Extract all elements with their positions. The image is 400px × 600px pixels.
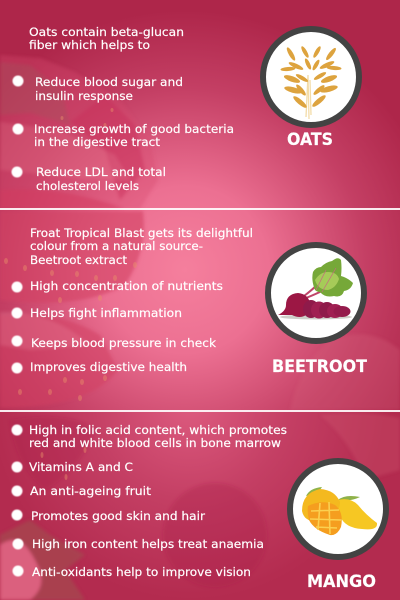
panel: beetroot text — [12, 226, 253, 374]
bullet: skin and hair: Promotes good skin and hair — [31, 509, 205, 523]
heading: mango: MANGO — [307, 572, 376, 591]
icon: mango — [290, 461, 386, 557]
bullet: digestive health: Improves digestive health — [30, 360, 187, 374]
bullet: blood pressure: Keeps blood pressure in check — [31, 336, 216, 350]
bullet: folic acid: High in folic acid content, which promotes — [29, 423, 287, 437]
intro text: beetroot: colour from a natural source- — [30, 239, 203, 253]
bullet: anti-ageing: An anti-ageing fruit — [30, 484, 152, 498]
panel: oats text — [12, 25, 234, 193]
bullet: good bacteria: in the digestive tract — [34, 135, 161, 149]
bullet: good bacteria: Increase growth of good bacteria — [34, 122, 234, 136]
divider bottom — [0, 410, 400, 412]
intro text: beetroot: Froat Tropical Blast gets its delightful — [30, 226, 253, 240]
bullet: blood sugar — [12, 75, 183, 103]
intro text: oats — [29, 25, 184, 52]
divider top — [0, 208, 400, 210]
bullet: inflammation: Helps fight inflammation — [30, 306, 182, 320]
bullet: blood sugar: insulin response — [35, 89, 133, 103]
bullet: folic acid: red and white blood cells in bone marrow — [29, 436, 281, 450]
bullet: LDL: cholesterol levels — [36, 179, 139, 193]
bullet: vitamins: Vitamins A and C — [29, 460, 133, 474]
bullet: folic acid — [12, 423, 287, 450]
heading: beetroot: BEETROOT — [272, 357, 368, 376]
bullet: good bacteria — [12, 122, 234, 149]
bullet: nutrients: High concentration of nutrients — [30, 279, 223, 293]
bullet: anti-oxidants: Anti-oxidants help to improve vision — [32, 565, 251, 579]
intro text: oats: fiber which helps to — [29, 38, 150, 52]
intro text: oats: Oats contain beta-glucan — [29, 25, 184, 39]
intro text: beetroot — [30, 226, 253, 267]
heading: oats: OATS — [287, 130, 333, 149]
icon: beetroot — [268, 245, 364, 341]
bullet: LDL — [12, 165, 166, 193]
strawberry seeds — [4, 108, 137, 480]
icon: oats — [263, 29, 359, 125]
panel: mango text — [12, 423, 287, 579]
bullet: blood sugar: Reduce blood sugar and — [35, 75, 183, 89]
bullet: iron: High iron content helps treat anaemia — [32, 537, 264, 551]
bullet: LDL: Reduce LDL and total — [36, 165, 166, 179]
intro text: beetroot: Beetroot extract — [30, 253, 127, 267]
